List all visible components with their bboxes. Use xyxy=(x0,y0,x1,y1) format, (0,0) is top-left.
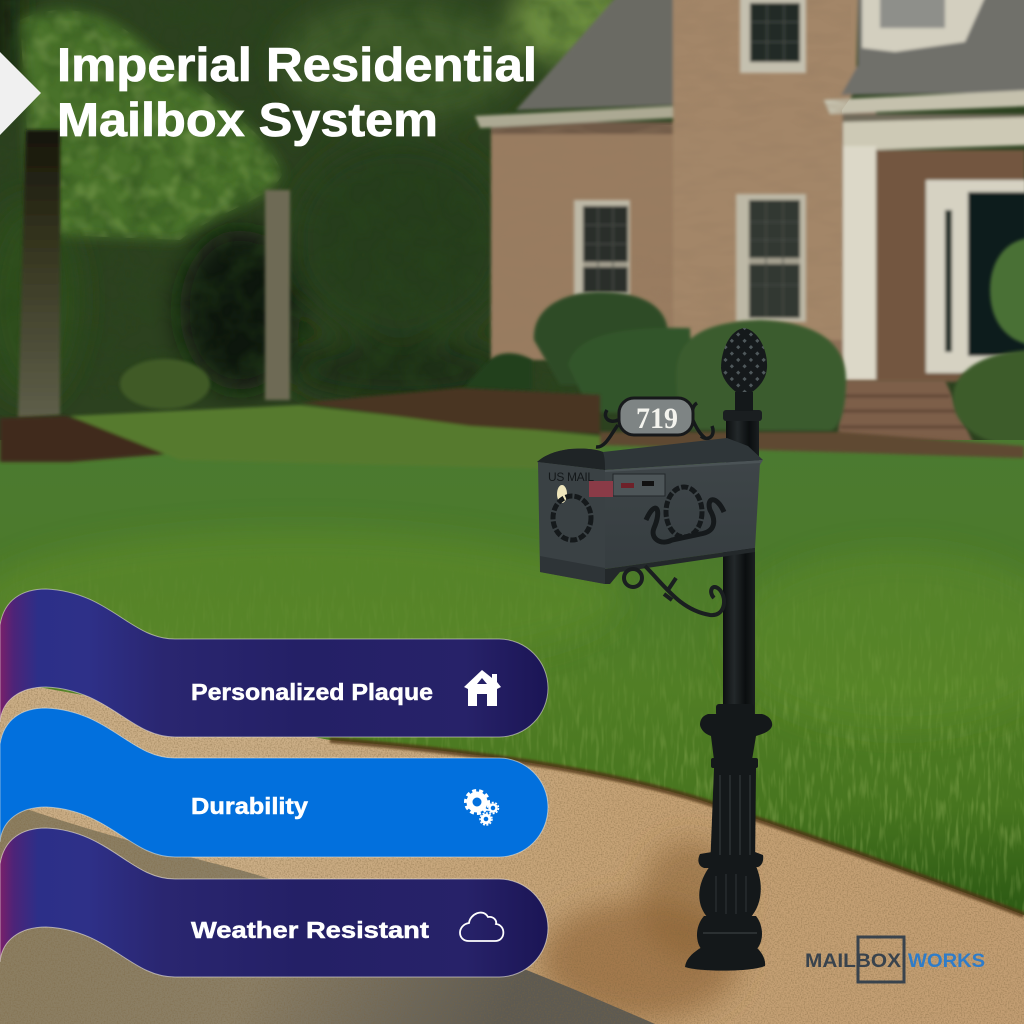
sand path xyxy=(0,680,1024,1024)
panel: Durability xyxy=(0,708,548,857)
mulch beds xyxy=(0,388,1024,470)
panel: Weather Resistant xyxy=(0,828,548,977)
icon: cloud xyxy=(460,913,503,941)
number plaque xyxy=(596,398,713,447)
pinecone finial xyxy=(721,328,767,411)
bushes xyxy=(460,238,1024,447)
bright canopy xyxy=(20,10,282,240)
logo: Mailbox Works xyxy=(805,937,985,982)
US MAIL lettering: US MAIL xyxy=(548,470,594,484)
mailbox roof xyxy=(537,438,763,470)
post base xyxy=(685,704,772,971)
label: Weather Resistant xyxy=(191,917,429,943)
title: Imperial Residential xyxy=(57,38,537,91)
front ornament xyxy=(646,487,724,542)
label: Personalized Plaque xyxy=(191,679,433,705)
brick mottling xyxy=(491,98,850,342)
number plaque: 719 xyxy=(636,402,678,435)
icon: house xyxy=(464,670,501,706)
arrow marker xyxy=(0,52,41,135)
logo: Mailbox Works: MAILBOX xyxy=(805,951,901,972)
title: Mailbox System xyxy=(57,93,438,146)
house xyxy=(475,0,1024,382)
support bracket xyxy=(624,566,724,615)
post collar xyxy=(723,410,762,421)
windows xyxy=(574,0,975,447)
label: Durability xyxy=(191,793,308,819)
post upper section xyxy=(726,415,759,465)
title xyxy=(57,38,537,146)
path shading xyxy=(540,840,740,1020)
side wreath ornament xyxy=(553,496,591,540)
tree backdrop xyxy=(0,0,616,404)
mail slot and flag xyxy=(557,474,665,503)
logo: Mailbox Works: WORKS xyxy=(908,951,985,972)
icon: gears xyxy=(466,790,498,825)
lawn xyxy=(0,388,1024,940)
mailbox on post xyxy=(537,328,772,971)
tree trunks xyxy=(18,130,290,418)
asphalt road xyxy=(0,800,655,1024)
mailbox front face xyxy=(605,463,760,569)
panel: Personalized Plaque xyxy=(0,589,548,737)
path grain xyxy=(0,680,1024,1024)
mailbox side face xyxy=(538,462,605,584)
grass edge xyxy=(330,740,1024,915)
grass shading xyxy=(0,530,1024,730)
post lower shaft xyxy=(723,545,755,715)
